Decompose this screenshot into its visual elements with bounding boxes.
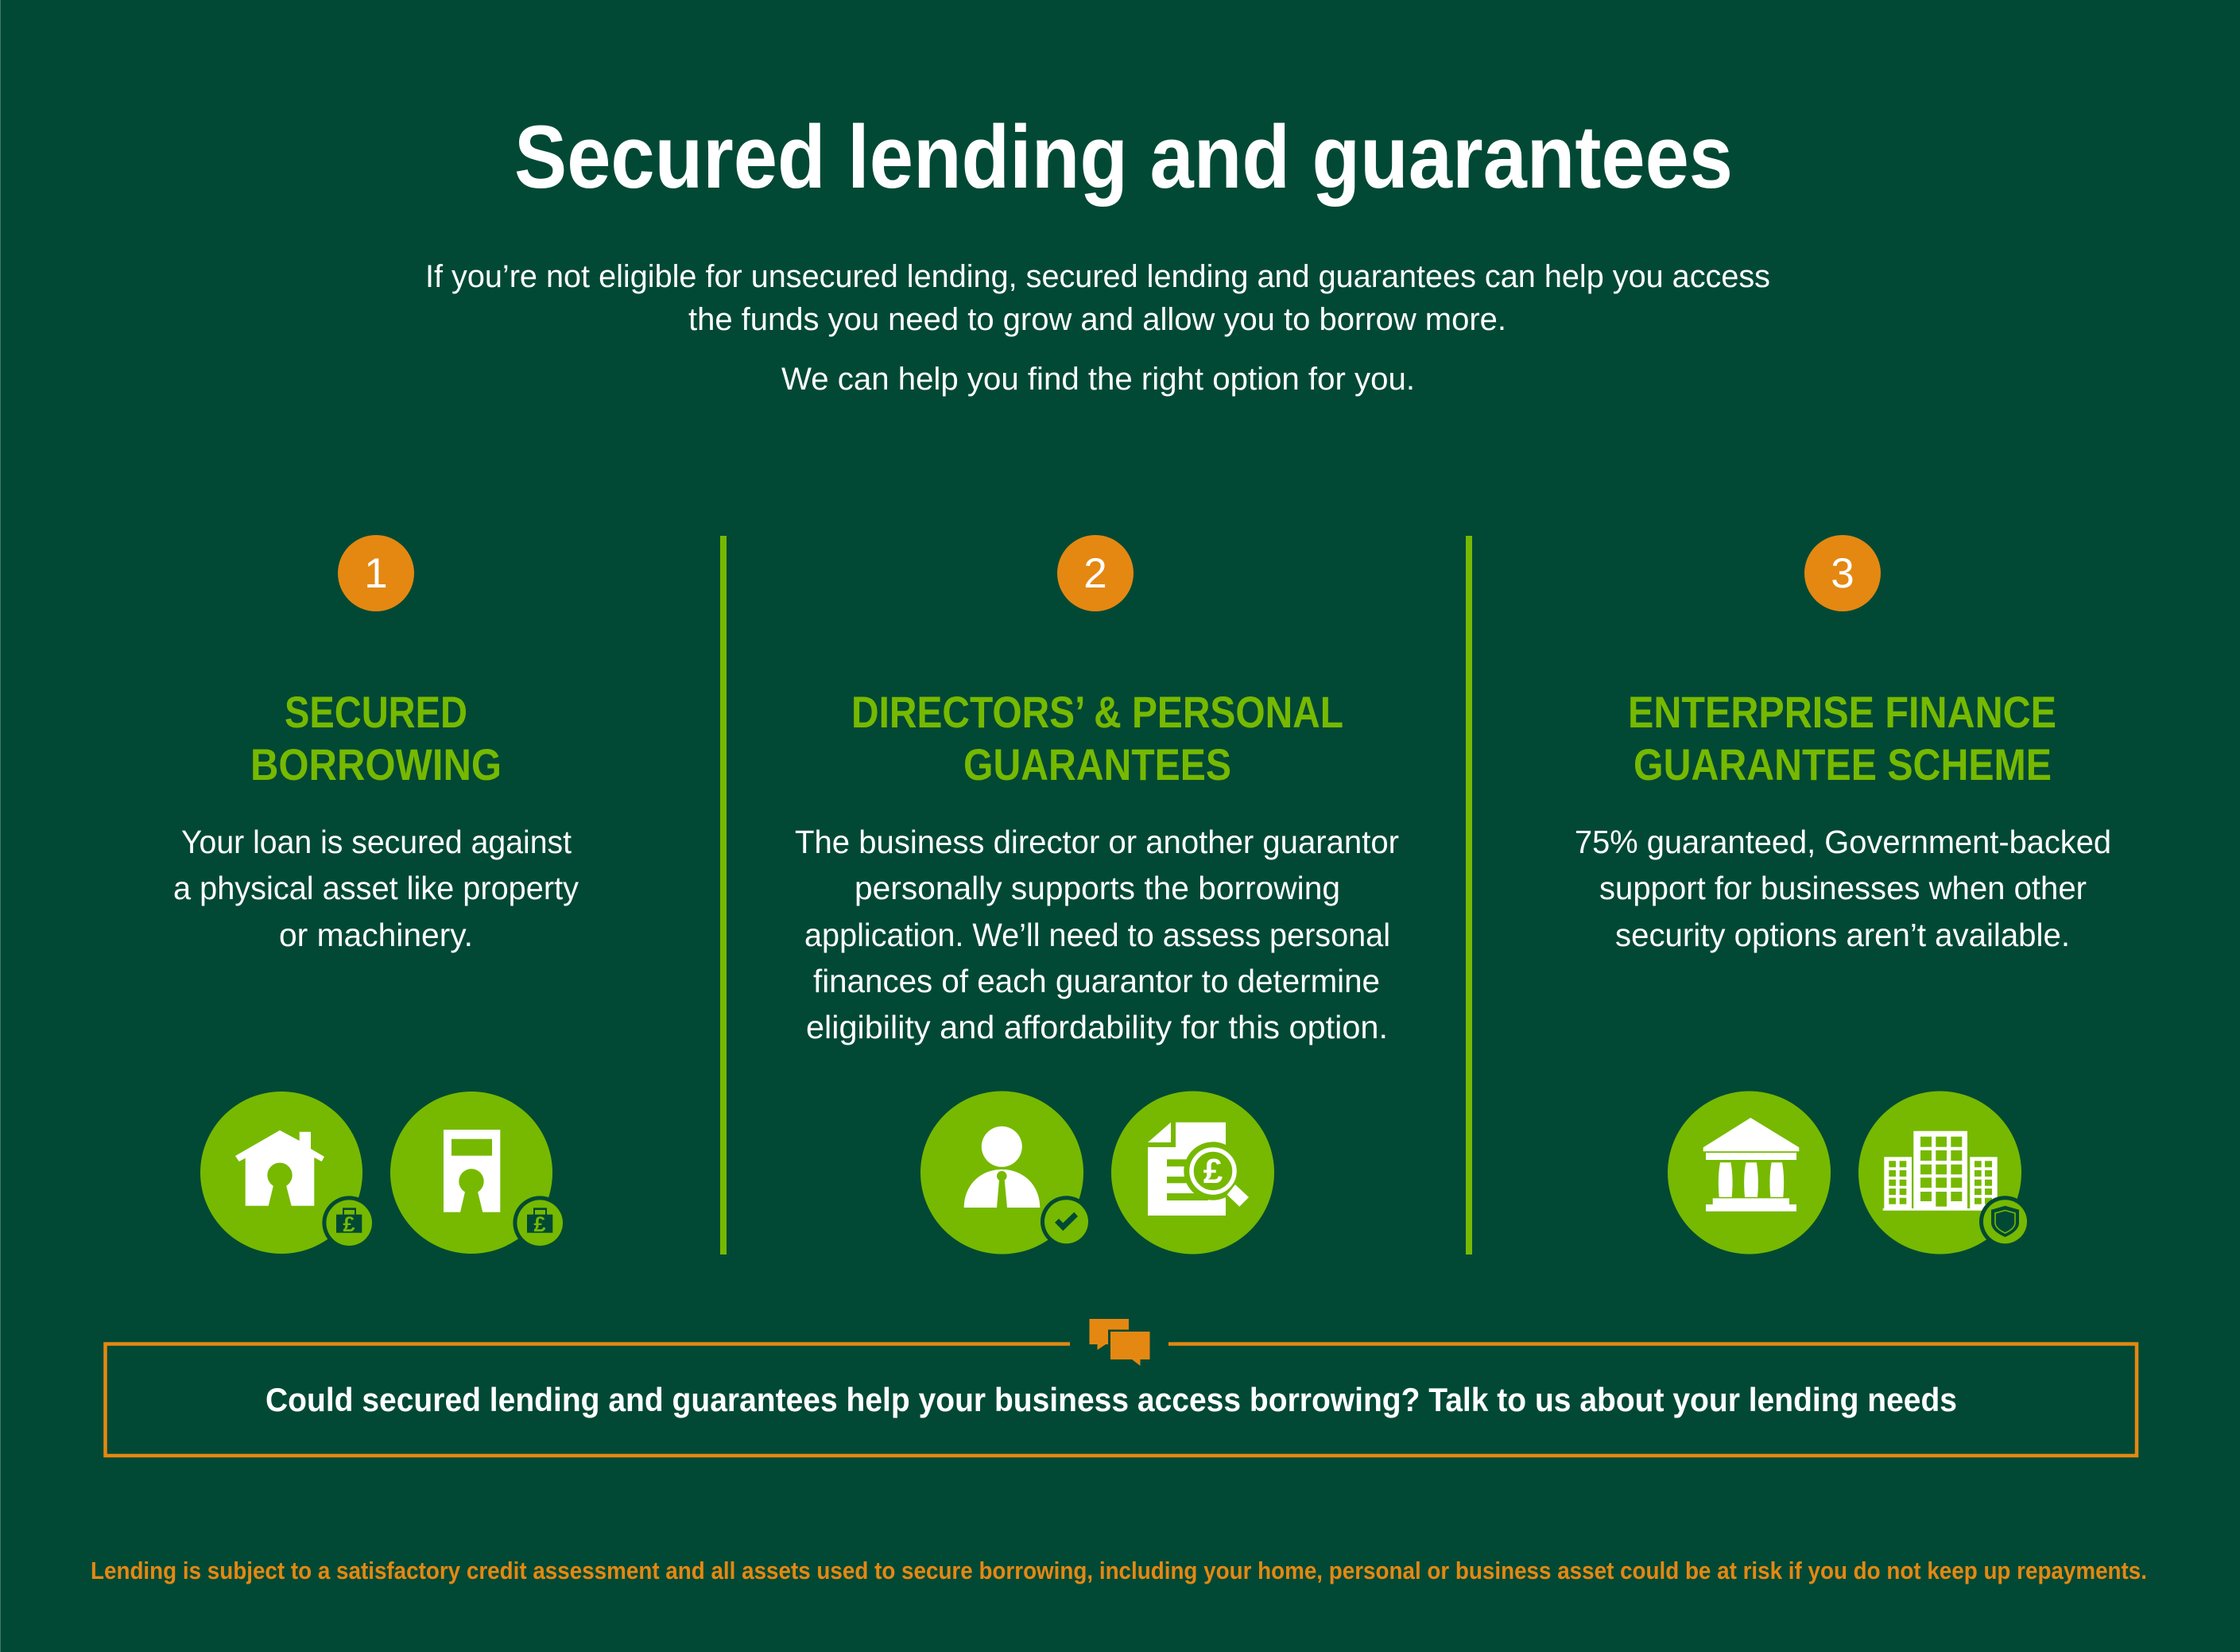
call to action box <box>105 1319 2137 1456</box>
icon: government bank building <box>1668 1091 1831 1255</box>
icon: document with magnifier and pound: £ <box>1203 1152 1223 1191</box>
description: directors and personal guarantees: The business director or another guarantor <box>795 824 1399 860</box>
description: directors and personal guarantees <box>795 824 1399 1045</box>
heading: secured borrowing: BORROWING <box>250 739 502 789</box>
intro text <box>425 259 1770 397</box>
divider: left <box>720 536 727 1255</box>
icon: speech bubbles <box>1089 1319 1149 1366</box>
call to action text: Could secured lending and guarantees help your business access borrowing? Talk to us about your lending needs <box>265 1381 1957 1418</box>
heading: enterprise finance guarantee scheme <box>1628 687 2056 789</box>
icon: document with magnifier and pound <box>1111 1091 1274 1255</box>
heading: enterprise finance guarantee scheme: ENTERPRISE FINANCE <box>1628 687 2056 737</box>
intro text: the funds you need to grow and allow you to borrow more. <box>688 302 1506 337</box>
panel: secured borrowing <box>173 535 579 1254</box>
icon: asset document with keyhole: £ <box>533 1212 546 1236</box>
title: Secured lending and guarantees <box>514 107 1733 207</box>
heading: directors and personal guarantees: GUARANTEES <box>963 739 1231 789</box>
description: directors and personal guarantees: personally supports the borrowing <box>855 870 1340 906</box>
description: secured borrowing <box>173 824 579 953</box>
icon: asset document with keyhole <box>390 1092 567 1254</box>
description: directors and personal guarantees: application. We’ll need to assess personal <box>804 917 1390 953</box>
heading: directors and personal guarantees <box>851 687 1343 789</box>
icon: house with keyhole <box>200 1092 376 1254</box>
heading: secured borrowing: SECURED <box>285 687 467 737</box>
icon: house with keyhole: £ <box>343 1212 355 1236</box>
description: secured borrowing: Your loan is secured against <box>181 824 572 860</box>
intro text: If you’re not eligible for unsecured lending, secured lending and guarantees can help you access <box>425 259 1770 294</box>
description: enterprise finance guarantee scheme <box>1575 824 2111 953</box>
description: secured borrowing: a physical asset like property <box>173 870 579 906</box>
description: enterprise finance guarantee scheme: security options aren’t available. <box>1615 917 2070 953</box>
heading: secured borrowing <box>250 687 502 789</box>
number badge 2 <box>1057 535 1134 611</box>
number badge 1: 1 <box>364 550 388 597</box>
number badge 2: 2 <box>1083 550 1107 597</box>
heading: directors and personal guarantees: DIRECTORS’ & PERSONAL <box>851 687 1343 737</box>
description: enterprise finance guarantee scheme: 75% guaranteed, Government-backed <box>1575 824 2111 860</box>
description: directors and personal guarantees: finances of each guarantor to determine <box>813 963 1380 999</box>
icon: guarantor person with check <box>920 1091 1092 1255</box>
heading: enterprise finance guarantee scheme: GUARANTEE SCHEME <box>1633 739 2052 789</box>
description: enterprise finance guarantee scheme: support for businesses when other <box>1599 870 2087 906</box>
description: directors and personal guarantees: eligibility and affordability for this option. <box>806 1009 1388 1045</box>
icon: office buildings with shield <box>1858 1091 2031 1255</box>
number badge 3 <box>1804 535 1881 611</box>
number badge 1 <box>338 535 414 611</box>
divider: right <box>1466 536 1472 1255</box>
number badge 3: 3 <box>1831 550 1854 597</box>
panel: directors and personal guarantees <box>795 535 1399 1255</box>
description: secured borrowing: or machinery. <box>279 917 473 953</box>
intro text: We can help you find the right option for you. <box>781 362 1415 397</box>
panel: enterprise finance guarantee scheme <box>1575 535 2111 1255</box>
